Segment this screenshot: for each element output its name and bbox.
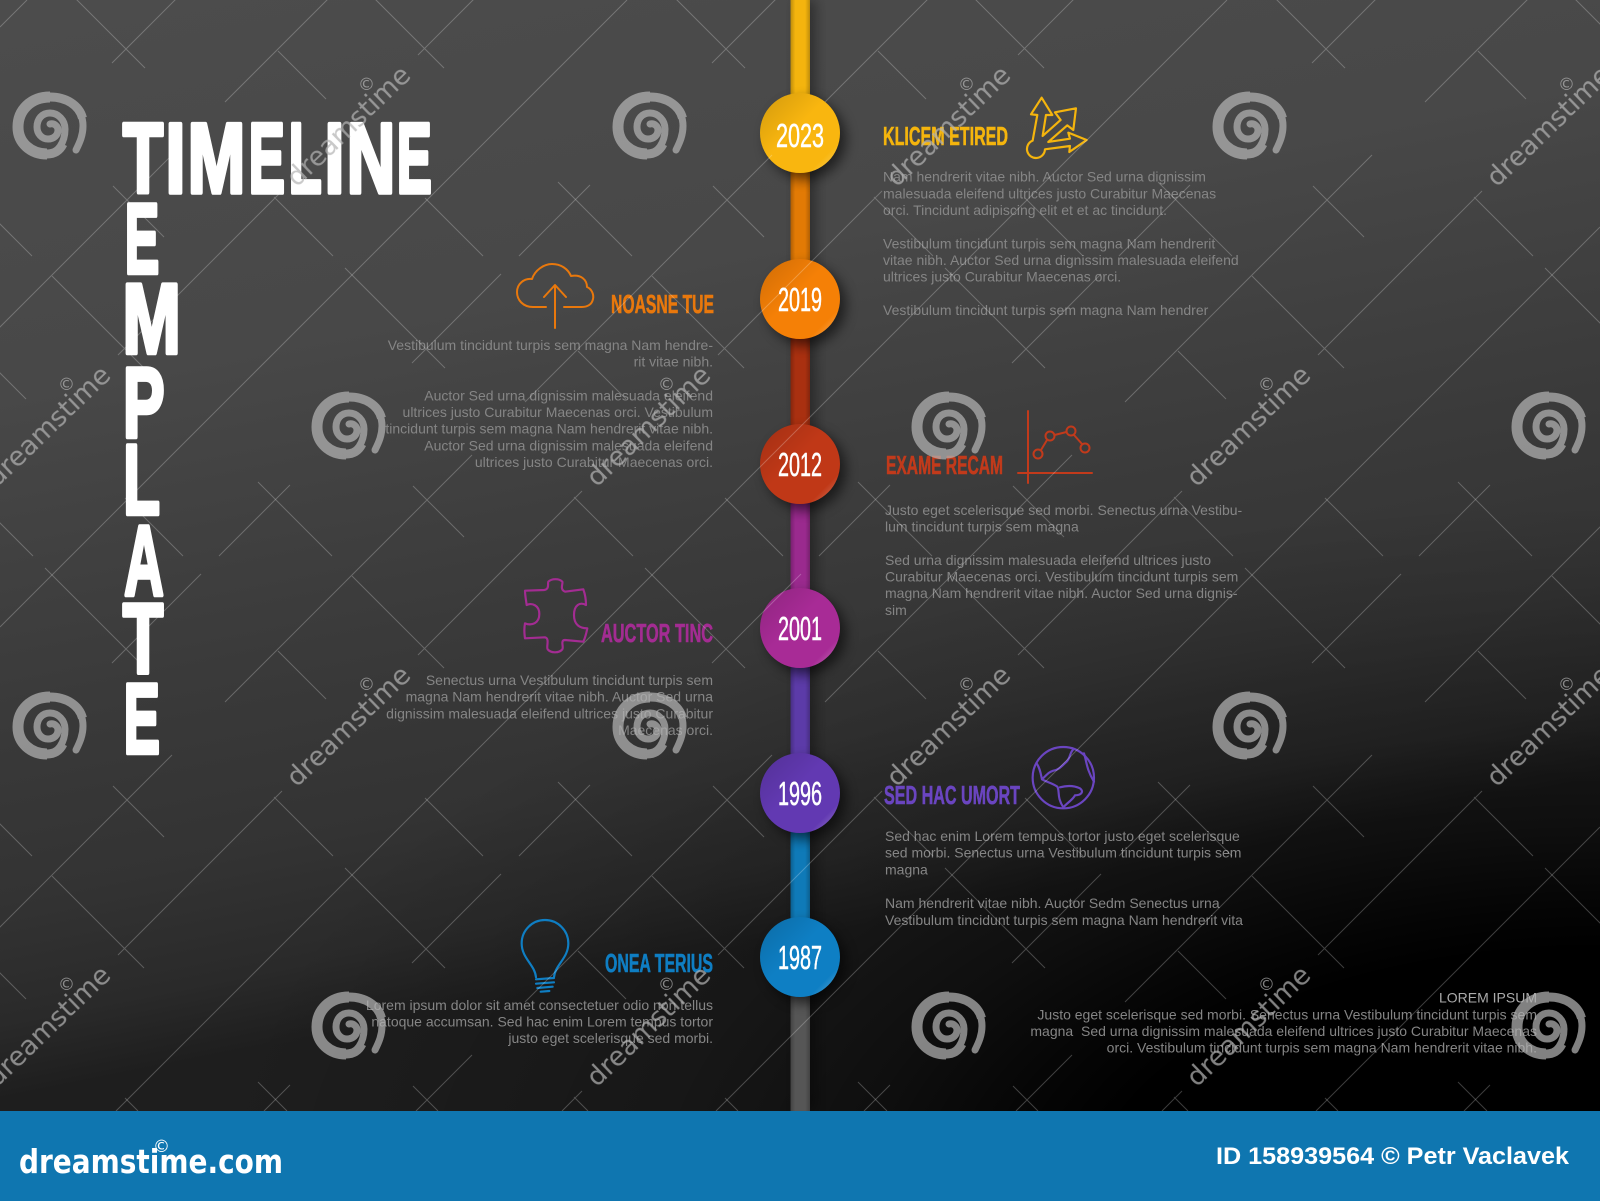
watermark text: dreamstime: [580, 960, 717, 1093]
timeline bar: [790, 0, 816, 1111]
text block: Klicem Etired: Vestibulum tincidunt turpis sem magna Nam hendrerit: [883, 235, 1215, 251]
year node: 2001: [760, 588, 846, 674]
text block: Sed Hac Umort: [885, 828, 1243, 928]
watermark text: ©: [958, 675, 975, 695]
callout: Lorem Ipsum: Justo eget scelerisque sed morbi. Senectus urna Vestibulum tincidunt turpis sem: [1037, 1006, 1537, 1022]
footer credit: ID 158939564 © Petr Vaclavek: [1216, 1143, 1569, 1170]
watermark text: ©: [1258, 975, 1275, 995]
year node: 2012: 2012: [778, 446, 822, 483]
text block: Onea Terius: Lorem ipsum dolor sit amet consectetuer odio non tellus: [366, 997, 713, 1013]
text block: Onea Terius: justo eget scelerisque sed morbi.: [507, 1030, 713, 1046]
text block: Exame Recam: lum tincidunt turpis sem magna: [885, 518, 1079, 534]
text block: Exame Recam: Curabitur Maecenas orci. Vestibulum tincidunt turpis sem: [885, 568, 1238, 584]
year node: 2012: [760, 424, 846, 510]
heading: Klicem Etired: KLICEM ETIRED: [883, 121, 1008, 151]
title: vertical TEMPLATE letters: A: [124, 505, 164, 616]
watermark spirals: [18, 97, 1582, 1054]
text block: Auctor Tinc: Maecenas orci.: [618, 722, 713, 738]
title: vertical TEMPLATE letters: P: [123, 347, 165, 458]
year node: 2019: [760, 259, 846, 345]
icon: line chart: [1018, 411, 1092, 483]
title: TIMELINE: E: [397, 102, 432, 213]
title: vertical TEMPLATE letters: E: [125, 183, 159, 294]
callout: Lorem Ipsum: magna Sed urna dignissim malesuada eleifend ultrices justo Curabitur Maecenas: [1030, 1023, 1537, 1039]
icon: diverging arrows: [1027, 98, 1087, 158]
title: vertical TEMPLATE letters: [123, 183, 181, 774]
text block: Klicem Etired: ultrices justo Curabitur Maecenas orci.: [883, 269, 1121, 285]
footer band: [0, 1111, 1600, 1201]
heading: Sed Hac Umort: SED HAC UMORT: [884, 780, 1020, 810]
text block: Exame Recam: sim: [885, 602, 907, 618]
watermark text: ©: [1558, 675, 1575, 695]
title: vertical TEMPLATE letters: E: [124, 663, 160, 774]
text block: Noasne Tue: ultrices justo Curabitur Maecenas orci.: [475, 454, 713, 470]
text block: Noasne Tue: rit vitae nibh.: [634, 354, 713, 370]
text block: Sed Hac Umort: Vestibulum tincidunt turpis sem magna Nam hendrerit vita: [885, 912, 1243, 928]
text block: Sed Hac Umort: sed morbi. Senectus urna Vestibulum tincidunt turpis sem: [885, 845, 1241, 861]
text block: Noasne Tue: [385, 337, 713, 470]
text block: Auctor Tinc: Senectus urna Vestibulum tincidunt turpis sem: [426, 672, 713, 688]
watermark text: ©: [58, 975, 75, 995]
text block: Klicem Etired: orci. Tincidunt adipiscing elit et et ac tincidunt.: [883, 202, 1167, 218]
text block: Klicem Etired: vitae nibh. Auctor Sed urna dignissim malesuada eleifend: [883, 252, 1239, 268]
watermark text: dreamstime: [1180, 360, 1317, 493]
footer logo: ©: [153, 1137, 170, 1157]
text block: Auctor Tinc: [386, 672, 713, 738]
watermark text: ©: [658, 375, 675, 395]
title: TIMELINE: E: [249, 102, 285, 213]
watermark text: dreamstime: [580, 360, 717, 493]
title: TIMELINE: L: [289, 102, 322, 213]
text block: Noasne Tue: Auctor Sed urna dignissim malesuada eleifend: [424, 387, 713, 403]
heading: Noasne Tue: NOASNE TUE: [611, 289, 714, 319]
watermark text: ©: [1258, 375, 1275, 395]
watermark text: ©: [658, 975, 675, 995]
watermark text: dreamstime: [280, 60, 417, 193]
icon: globe: [1033, 747, 1094, 808]
heading: Onea Terius: ONEA TERIUS: [605, 948, 713, 978]
icon: light bulb: [522, 920, 568, 992]
watermark text: ©: [358, 75, 375, 95]
text block: Exame Recam: Sed urna dignissim malesuada eleifend ultrices justo: [885, 552, 1211, 568]
title: TIMELINE: T: [123, 102, 163, 213]
text block: Exame Recam: magna Nam hendrerit vitae nibh. Auctor Sed urna dignis-: [885, 585, 1238, 601]
heading: Auctor Tinc: AUCTOR TINC: [601, 618, 713, 648]
text block: Sed Hac Umort: Nam hendrerit vitae nibh. Auctor Sedm Senectus urna: [885, 895, 1220, 911]
text block: Klicem Etired: [883, 169, 1239, 318]
text block: Onea Terius: natoque accumsan. Sed hac enim Lorem tempus tortor: [371, 1014, 713, 1030]
text block: Noasne Tue: ultrices justo Curabitur Maecenas orci. Vestibulum: [403, 404, 713, 420]
text block: Sed Hac Umort: magna: [885, 862, 928, 878]
year node: 2023: [760, 93, 846, 179]
title: TIMELINE: M: [188, 102, 245, 213]
text block: Klicem Etired: Vestibulum tincidunt turpis sem magna Nam hendrer: [883, 302, 1209, 318]
title: TIMELINE: [123, 102, 432, 213]
icon: puzzle piece: [524, 579, 587, 652]
year node: 1987: 1987: [778, 939, 822, 976]
text block: Klicem Etired: Nam hendrerit vitae nibh. Auctor Sed urna dignissim: [883, 169, 1206, 185]
watermark text: dreamstime: [1180, 960, 1317, 1093]
text block: Klicem Etired: malesuada eleifend ultrices justo Curabitur Maecenas: [883, 185, 1216, 201]
text block: Onea Terius: [366, 997, 713, 1046]
callout: Lorem Ipsum: LOREM IPSUM: [1439, 990, 1537, 1006]
text block: Auctor Tinc: magna Nam hendrerit vitae nibh. Auctor Sed urna: [406, 689, 713, 705]
title: TIMELINE: I: [324, 102, 345, 213]
watermark text: dreamstime: [880, 60, 1017, 193]
text block: Sed Hac Umort: Sed hac enim Lorem tempus tortor justo eget scelerisque: [885, 828, 1240, 844]
year node: 1996: [760, 753, 846, 839]
title: TIMELINE: N: [347, 102, 395, 213]
callout: Lorem Ipsum: orci. Vestibulum tincidunt turpis sem magna Nam hendrerit vitae nibh.: [1107, 1040, 1537, 1056]
text block: Noasne Tue: Auctor Sed urna dignissim malesuada eleifend: [424, 437, 713, 453]
callout: Lorem Ipsum: [1030, 990, 1537, 1056]
title: vertical TEMPLATE letters: M: [123, 263, 181, 374]
watermark text: ©: [358, 675, 375, 695]
title: TIMELINE: I: [165, 102, 186, 213]
year node: 1996: 1996: [778, 775, 822, 812]
watermark text: ©: [1558, 75, 1575, 95]
footer logo: dreamstime.com: [19, 1142, 283, 1181]
icon: cloud upload: [517, 264, 593, 328]
text block: Auctor Tinc: dignissim malesuada eleifend ultrices justo Curabitur: [386, 705, 713, 721]
year node: 1987: [760, 917, 846, 1003]
watermark text: dreamstime: [280, 660, 417, 793]
heading: Exame Recam: EXAME RECAM: [886, 450, 1003, 480]
year node: 2023: 2023: [776, 117, 824, 154]
title: vertical TEMPLATE letters: L: [123, 424, 160, 535]
title: vertical TEMPLATE letters: T: [123, 583, 163, 694]
text block: Noasne Tue: tincidunt turpis sem magna Nam hendrerit vitae nibh.: [385, 421, 713, 437]
watermark text: dreamstime: [880, 660, 1017, 793]
text block: Exame Recam: Justo eget scelerisque sed morbi. Senectus urna Vestibu-: [885, 502, 1243, 518]
text block: Noasne Tue: Vestibulum tincidunt turpis sem magna Nam hendre-: [388, 337, 713, 353]
year node: 2019: 2019: [778, 281, 822, 318]
year node: 2001: 2001: [778, 610, 822, 647]
text block: Exame Recam: [885, 502, 1243, 618]
watermark text: ©: [958, 75, 975, 95]
watermark text: ©: [58, 375, 75, 395]
